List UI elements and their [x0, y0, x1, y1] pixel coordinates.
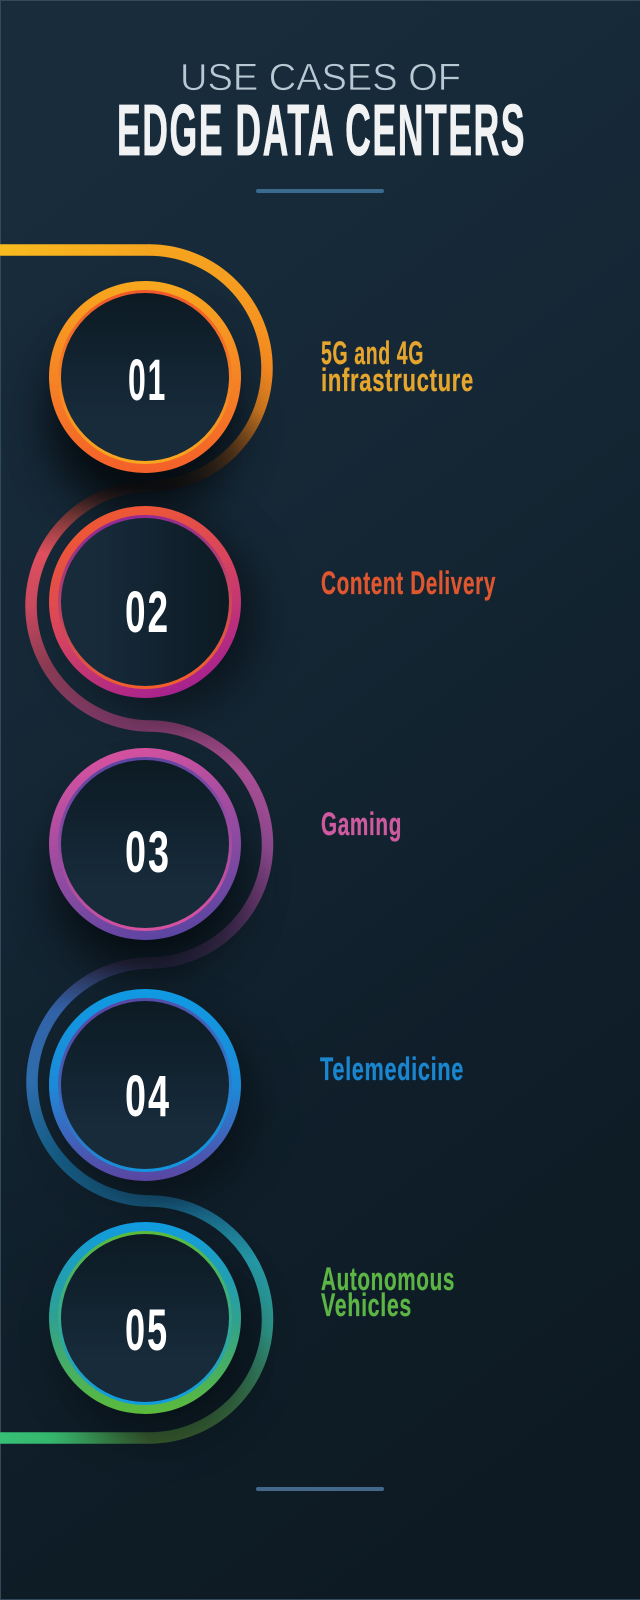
- number: 04: [125, 1064, 171, 1129]
- title: [117, 57, 526, 171]
- number: 05: [125, 1298, 169, 1363]
- label: 5G and 4G infrastructure: [321, 335, 474, 398]
- ring: [49, 989, 241, 1181]
- bottom divider: [256, 1487, 384, 1491]
- label: autonomous vehicles: Autonomous: [321, 1261, 455, 1297]
- disc: [61, 293, 229, 461]
- number: 01: [128, 348, 167, 413]
- shadow: [48, 324, 236, 512]
- title line: use cases of: USE CASES OF: [180, 57, 461, 99]
- disc: [61, 518, 229, 686]
- label: autonomous vehicles: [321, 1261, 455, 1323]
- ring: [49, 1222, 241, 1414]
- label: content delivery: Content Delivery: [321, 565, 496, 601]
- shadow: [66, 1255, 250, 1435]
- ring: [49, 748, 241, 940]
- ring: [49, 506, 241, 698]
- shadow: [68, 1013, 252, 1197]
- shadow: [54, 788, 242, 972]
- shadow: [73, 521, 257, 709]
- step 05: [49, 1222, 250, 1435]
- top divider: [256, 189, 384, 193]
- step 02: [49, 506, 257, 709]
- step 04: [49, 989, 252, 1197]
- label: 5G and 4G infrastructure: infrastructure: [321, 362, 474, 398]
- number: 03: [125, 820, 171, 885]
- disc: [61, 1001, 229, 1169]
- label: telemedicine: Telemedicine: [320, 1051, 464, 1087]
- ring: [49, 281, 241, 473]
- winding gradient path: [0, 250, 267, 1438]
- disc: [61, 1234, 229, 1402]
- disc: [61, 760, 229, 928]
- label: 5G and 4G infrastructure: 5G and 4G: [321, 335, 424, 371]
- label: autonomous vehicles: Vehicles: [321, 1287, 412, 1323]
- step 03: [49, 748, 242, 972]
- label: gaming: Gaming: [321, 806, 402, 842]
- step 01: [48, 281, 241, 512]
- number: 02: [125, 580, 170, 645]
